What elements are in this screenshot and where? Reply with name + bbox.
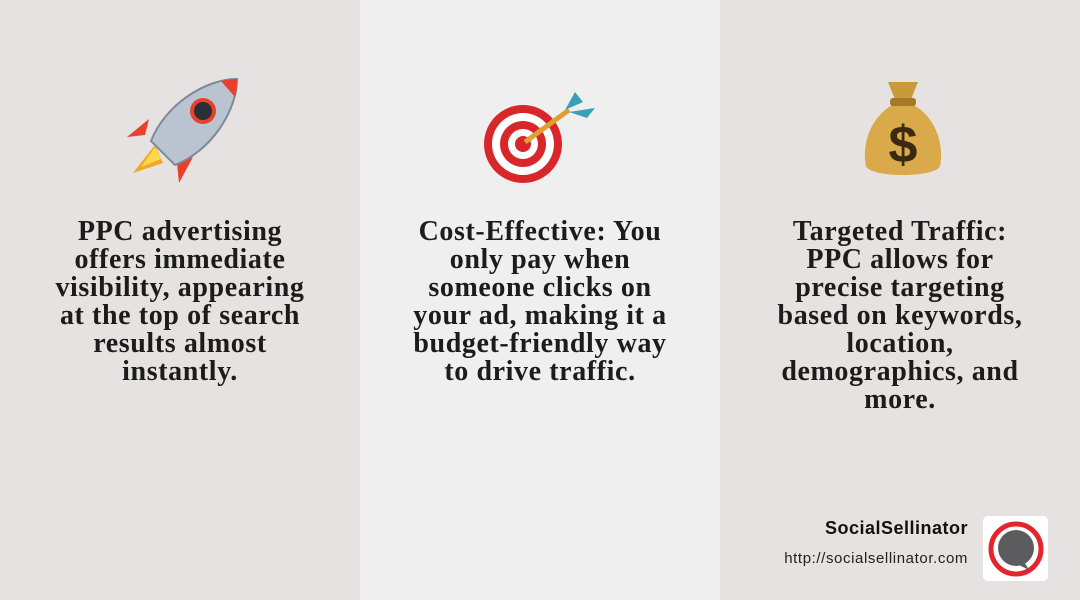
text: cost-effective: to drive traffic. — [444, 356, 636, 387]
text: immediate visibility: visibility, appearing — [55, 272, 305, 303]
text: immediate visibility: results almost — [93, 328, 267, 359]
text: cost-effective: your ad, making it a — [413, 300, 667, 331]
text: cost-effective: only pay when — [450, 244, 630, 275]
brand name: SocialSellinator — [825, 518, 968, 538]
icon: money bag — [864, 82, 942, 175]
icon: target with dart — [484, 92, 595, 183]
text: cost-effective: budget-friendly way — [413, 328, 667, 359]
icon: rocket — [127, 78, 238, 183]
icon: money bag: $ — [889, 116, 918, 174]
text: immediate visibility: instantly. — [122, 356, 238, 387]
panel: immediate visibility — [0, 0, 360, 600]
panel: targeted traffic — [720, 0, 1080, 600]
text: targeted traffic: demographics, and — [781, 356, 1019, 387]
text: cost-effective: someone clicks on — [428, 272, 652, 303]
text: targeted traffic: PPC allows for — [806, 244, 994, 275]
text: targeted traffic: location, — [846, 328, 954, 359]
text: targeted traffic: based on keywords, — [778, 300, 1022, 331]
text: immediate visibility: at the top of search — [60, 300, 300, 331]
logo — [983, 516, 1048, 581]
brand url: http://socialsellinator.com — [784, 550, 968, 567]
text: immediate visibility: PPC advertising — [78, 216, 282, 247]
text: immediate visibility: offers immediate — [75, 244, 285, 275]
text: targeted traffic: more. — [864, 384, 936, 415]
text: immediate visibility — [55, 216, 305, 387]
text: targeted traffic: precise targeting — [795, 272, 1005, 303]
panel: cost-effective — [360, 0, 720, 600]
text: cost-effective — [413, 216, 667, 387]
text: targeted traffic: Targeted Traffic: — [793, 216, 1007, 247]
text: cost-effective: Cost-Effective: You — [419, 216, 661, 247]
text: targeted traffic — [778, 216, 1022, 415]
